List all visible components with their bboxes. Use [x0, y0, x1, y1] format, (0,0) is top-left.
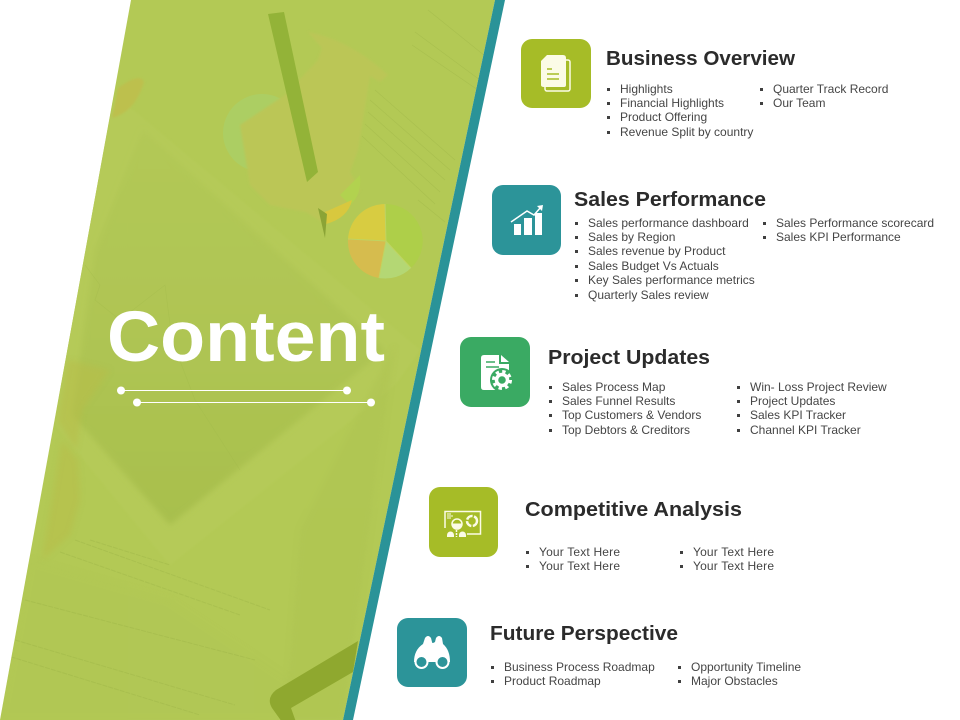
bullet list right [737, 380, 887, 437]
bullet list left: Sales by Region [588, 230, 675, 244]
photo: clipboard corner [270, 641, 358, 720]
bullet list left: Sales revenue by Product [588, 244, 726, 258]
photo: tablet screen [82, 394, 322, 522]
bullet list right: Win- Loss Project Review [750, 380, 887, 394]
heading: Project Updates [548, 346, 710, 369]
bullet list right: Project Updates [750, 394, 835, 408]
bullet list left: Your Text Here [539, 545, 620, 559]
photo: pie chart [348, 204, 423, 279]
photo: small yellow chart slice [325, 200, 352, 224]
bullet list right [763, 216, 934, 244]
icon: document with gear [460, 337, 530, 407]
bullet list right: Your Text Here [693, 559, 774, 573]
photo: hand [240, 98, 298, 172]
bullet list left: Financial Highlights [620, 96, 724, 110]
bullet list left: Revenue Split by country [620, 125, 753, 139]
bullet list right: Sales KPI Tracker [750, 408, 846, 422]
photo: pen [268, 12, 318, 182]
bullet list left: Highlights [620, 82, 673, 96]
bullet list left [607, 82, 753, 139]
bullet list right [678, 660, 801, 688]
teal diagonal stripe [343, 0, 505, 720]
icon: documents [521, 39, 591, 108]
bullet list left: Business Process Roadmap [504, 660, 655, 674]
bullet list left [526, 545, 620, 573]
bullet list left [491, 660, 655, 688]
heading: Future Perspective [490, 622, 678, 645]
bullet list right: Channel KPI Tracker [750, 423, 861, 437]
bullet list left: Sales Budget Vs Actuals [588, 259, 719, 273]
photo: lower document shading [285, 345, 395, 720]
bullet list left: Sales Process Map [562, 380, 666, 394]
bullet list left: Sales performance dashboard [588, 216, 749, 230]
title: Content [107, 298, 385, 377]
photo: donut chart [223, 94, 279, 168]
bullet list right: Major Obstacles [691, 674, 778, 688]
section: Future Perspective [397, 618, 801, 688]
bullet list left: Your Text Here [539, 559, 620, 573]
bullet list left: Product Roadmap [504, 674, 601, 688]
section: Competitive Analysis [429, 487, 774, 573]
photo: chart line on tablet [85, 265, 240, 470]
section: Project Updates [460, 337, 887, 437]
heading: Sales Performance [574, 188, 766, 211]
photo: yellow finger edge [62, 365, 77, 438]
icon: binoculars [397, 618, 467, 687]
bullet list right: Our Team [773, 96, 825, 110]
bullet list left: Product Offering [620, 110, 707, 124]
bullet list right: Quarter Track Record [773, 82, 888, 96]
bullet list left: Key Sales performance metrics [588, 273, 755, 287]
bullet list right: Your Text Here [693, 545, 774, 559]
bullet list left: Top Customers & Vendors [562, 408, 701, 422]
bullet list right [680, 545, 774, 573]
icon: growth chart [492, 185, 561, 255]
bullet list right: Sales KPI Performance [776, 230, 901, 244]
photo: document lines [362, 10, 490, 222]
left photo panel [0, 0, 495, 720]
bullet list left: Sales Funnel Results [562, 394, 675, 408]
heading: Business Overview [606, 47, 795, 70]
bullet list left [549, 380, 701, 437]
photo: green circle under hand [340, 176, 360, 204]
section: Business Overview [521, 39, 888, 139]
icon: presentation board [429, 487, 498, 557]
photo: tablet frame [55, 106, 112, 416]
bullet list right: Opportunity Timeline [691, 660, 801, 674]
bullet list left: Top Debtors & Creditors [562, 423, 690, 437]
bullet list left: Quarterly Sales review [588, 288, 709, 302]
title underline decoration [117, 386, 375, 406]
photo: document text [5, 540, 270, 715]
heading: Competitive Analysis [525, 498, 742, 521]
bullet list right [760, 82, 888, 110]
section: Sales Performance [492, 185, 934, 302]
bullet list right: Sales Performance scorecard [776, 216, 934, 230]
bullet list left [575, 216, 755, 302]
photo: top left finger [113, 79, 142, 116]
